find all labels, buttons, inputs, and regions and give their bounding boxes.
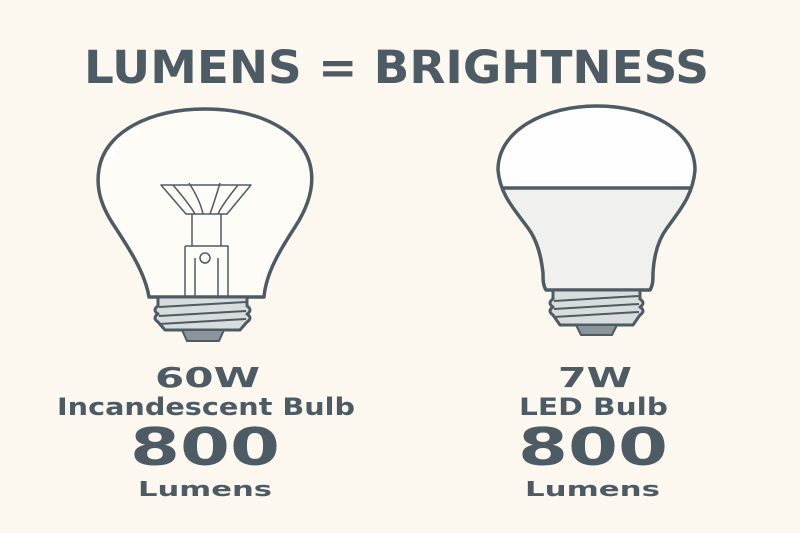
icon: LED bulb <box>498 106 695 335</box>
text: left labels: 800 <box>130 418 280 478</box>
text: right labels <box>518 361 668 501</box>
title: LUMENS = BRIGHTNESS <box>84 41 709 94</box>
text: left labels: Lumens <box>138 477 272 501</box>
text: right labels: 800 <box>518 418 668 478</box>
icon: incandescent bulb <box>98 109 312 341</box>
text: right labels: 7W <box>558 361 632 394</box>
text: right labels: LED Bulb <box>519 393 668 421</box>
text: left labels: Incandescent Bulb <box>57 393 355 421</box>
text: left labels: 60W <box>155 361 260 394</box>
text: left labels <box>57 361 355 501</box>
text: right labels: Lumens <box>525 477 660 501</box>
